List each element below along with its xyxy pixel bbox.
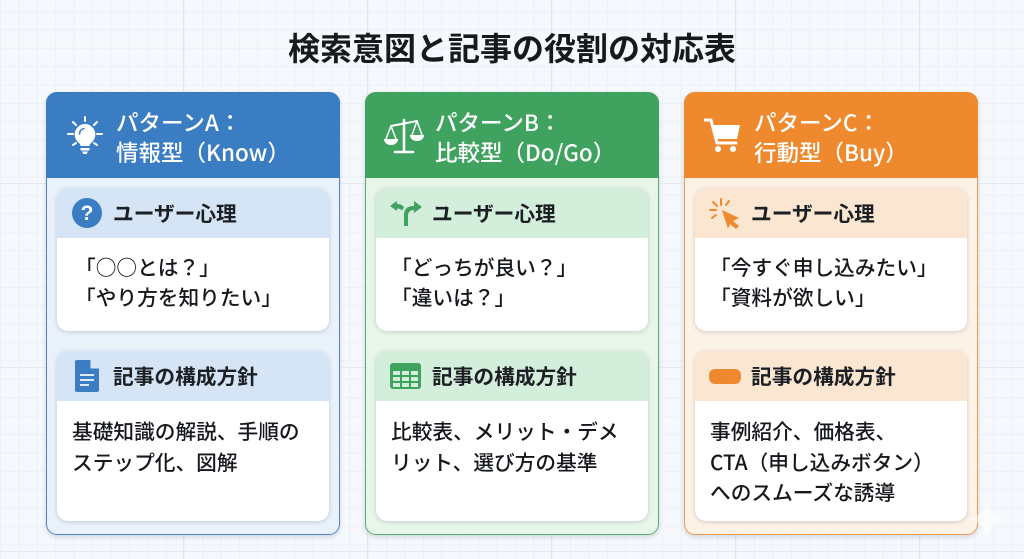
- card heading: 記事の構成方針: [751, 360, 896, 390]
- icon: sparkle watermark: [969, 508, 994, 527]
- card text: 比較表、メリット・デメ: [391, 415, 619, 445]
- icon: cursor click: [709, 198, 739, 229]
- panel header: pattern B: [365, 92, 659, 178]
- card text: [710, 415, 934, 506]
- card text: [75, 251, 282, 311]
- panel header: pattern A: [46, 92, 340, 178]
- icon: table: [390, 363, 421, 389]
- card header: article structure A: [57, 351, 329, 401]
- icon: question mark: [72, 198, 102, 228]
- icon: balance scale: [384, 118, 424, 154]
- card text: 「違いは？」: [391, 281, 515, 311]
- card text: へのスムーズな誘導: [710, 476, 895, 506]
- card: user psychology B: [376, 188, 648, 331]
- card: article structure B: [376, 351, 648, 521]
- icon: CTA button: [709, 369, 741, 384]
- card: user psychology A: [57, 188, 329, 331]
- panel: pattern C: [684, 92, 978, 535]
- card heading: ユーザー心理: [113, 197, 237, 227]
- card text: 「○○とは？」: [75, 251, 220, 281]
- card text: 事例紹介、価格表、: [710, 415, 896, 445]
- title: 検索意図と記事の役割の対応表: [288, 24, 736, 70]
- header text: pattern C: 行動型（Buy）: [754, 136, 908, 168]
- icon: diverging arrows: [390, 201, 422, 226]
- card heading: 記事の構成方針: [113, 360, 258, 390]
- card text: 基礎知識の解説、手順の: [72, 415, 300, 445]
- icon: question mark: ?: [81, 202, 93, 225]
- header text: pattern C: [754, 106, 908, 168]
- card text: 「やり方を知りたい」: [75, 281, 282, 311]
- card text: [391, 415, 619, 476]
- card heading: ユーザー心理: [432, 197, 556, 227]
- card text: リット、選び方の基準: [391, 446, 597, 476]
- card header: user psychology B: [376, 188, 648, 238]
- icon: shopping cart: [704, 118, 740, 152]
- card text: [72, 415, 300, 476]
- card header: article structure B: [376, 351, 648, 401]
- card text: 「今すぐ申し込みたい」: [710, 251, 938, 281]
- card header: user psychology A: [57, 188, 329, 238]
- card text: [710, 251, 938, 311]
- header text: pattern A: [116, 106, 290, 168]
- card: article structure C: [695, 351, 967, 521]
- header text: pattern C: パターンC：: [754, 106, 880, 138]
- header text: pattern A: パターンA：: [116, 106, 241, 138]
- card header: user psychology C: [695, 188, 967, 238]
- icon: document: [75, 360, 99, 392]
- panel: pattern B: [365, 92, 659, 535]
- panel: pattern A: [46, 92, 340, 535]
- card text: 「どっちが良い？」: [391, 251, 577, 281]
- header text: pattern A: 情報型（Know）: [116, 136, 290, 168]
- card heading: 記事の構成方針: [432, 360, 577, 390]
- card text: ステップ化、図解: [72, 446, 238, 476]
- card header: article structure C: [695, 351, 967, 401]
- card heading: ユーザー心理: [751, 197, 875, 227]
- card text: [391, 251, 577, 311]
- card: user psychology C: [695, 188, 967, 331]
- header text: pattern B: 比較型（Do/Go）: [435, 136, 615, 168]
- header text: pattern B: [435, 106, 615, 168]
- card: article structure A: [57, 351, 329, 521]
- icon: light bulb: [67, 116, 103, 154]
- card text: CTA（申し込みボタン）: [710, 446, 934, 476]
- header text: pattern B: パターンB：: [435, 106, 561, 138]
- card text: 「資料が欲しい」: [710, 281, 876, 311]
- panel header: pattern C: [684, 92, 978, 178]
